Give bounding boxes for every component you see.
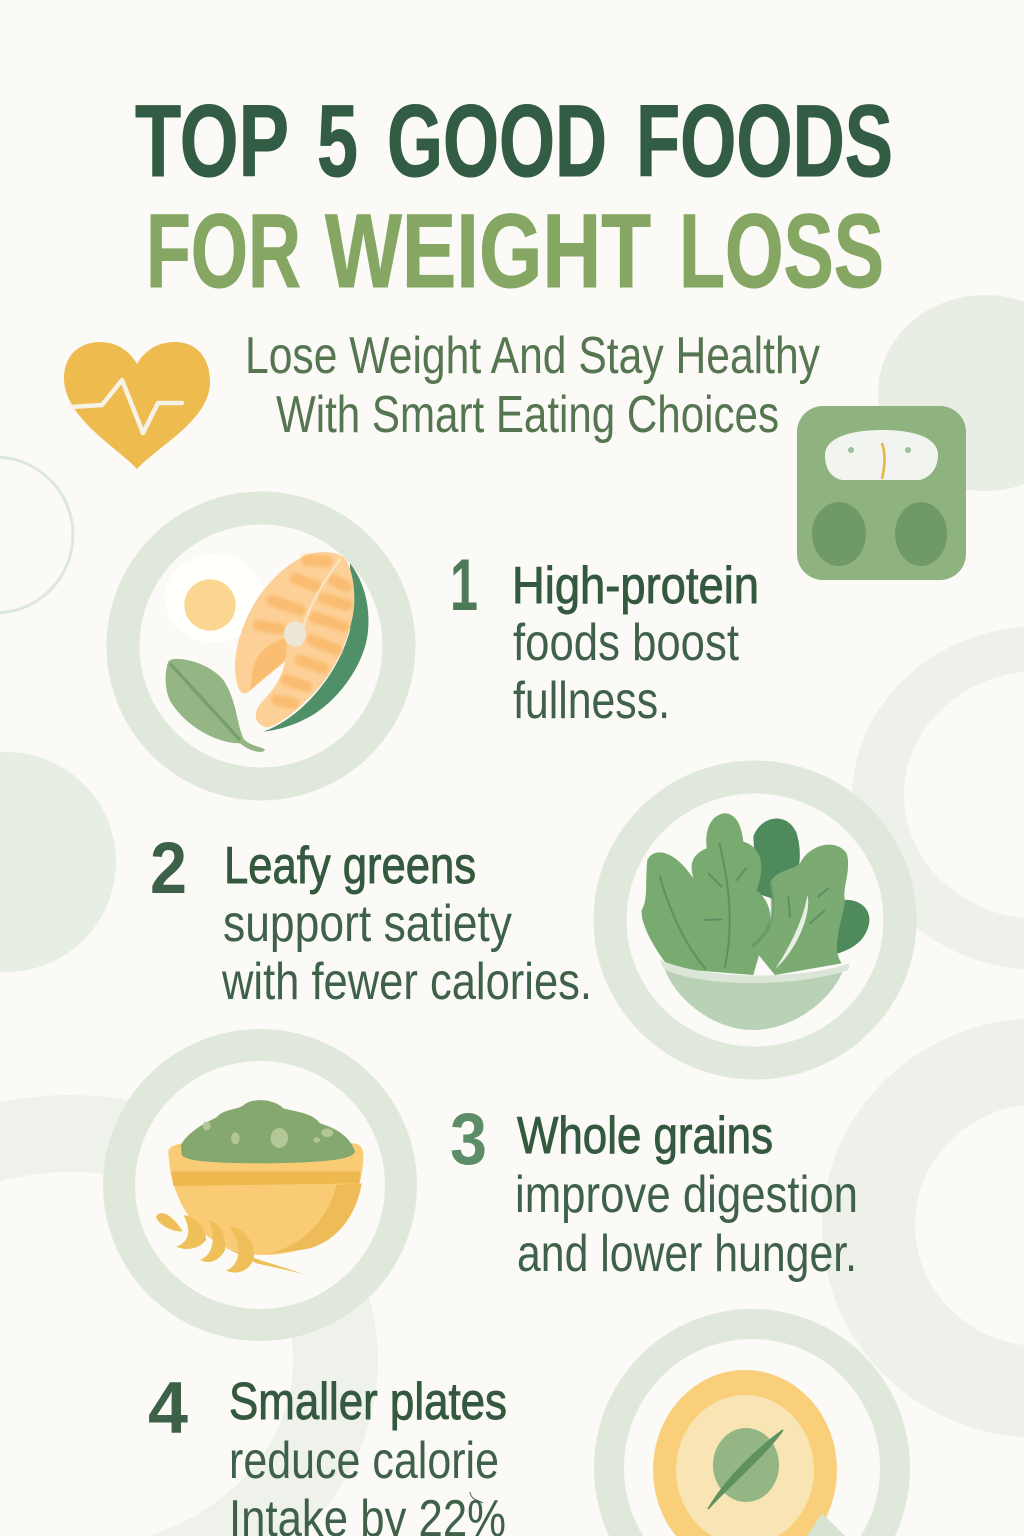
item 1 text <box>512 557 759 730</box>
title: LOSS <box>679 193 884 310</box>
panel: item 2 leafy greens <box>610 777 900 1063</box>
icon: egg <box>165 554 263 642</box>
item 2 number: 2 <box>150 828 187 909</box>
plate ring 3 <box>119 1045 401 1325</box>
item 3 text: Whole grains <box>517 1107 773 1165</box>
plate ring 4 <box>609 1324 895 1536</box>
panel: item 3 whole grains <box>119 1045 401 1325</box>
item 3 text <box>515 1107 858 1283</box>
icon: weighing scale <box>797 406 966 580</box>
title: GOOD <box>387 84 607 198</box>
icon: spinach leaf <box>166 659 265 752</box>
item 1 text: High-protein <box>512 557 759 615</box>
item 4 text: Smaller plates <box>229 1373 507 1431</box>
icon: grain bowl <box>156 1100 363 1274</box>
item 1 text: foods boost <box>513 614 739 672</box>
subtitle: Lose Weight And Stay Healthy <box>245 327 820 385</box>
title: WEIGHT <box>325 193 651 310</box>
item 4 number: 4 <box>148 1368 188 1449</box>
item 2 text: with fewer calories. <box>221 953 592 1011</box>
icon: salmon steak <box>235 552 368 732</box>
title: FOR <box>146 193 301 310</box>
icon: small plate <box>653 1370 845 1536</box>
icon: salad bowl <box>642 813 869 1030</box>
item 2 text <box>221 837 592 1011</box>
title: 5 <box>317 84 358 198</box>
subtitle <box>245 327 820 444</box>
plate ring 1 <box>123 508 399 784</box>
item 4 text: reduce calorie <box>229 1432 499 1490</box>
panel: item 4 smaller plates <box>609 1324 895 1536</box>
panel: item 1 high-protein <box>123 508 399 784</box>
item 3 text: improve digestion <box>515 1166 858 1224</box>
item 3 number: 3 <box>450 1099 487 1180</box>
title <box>135 84 893 310</box>
item 4 text <box>229 1373 507 1536</box>
item 3 text: and lower hunger. <box>517 1225 857 1283</box>
plate ring 2 <box>610 777 900 1063</box>
icon: heart with pulse <box>64 342 210 469</box>
item 1 number: 1 <box>450 545 478 626</box>
item 2 text: Leafy greens <box>224 837 476 895</box>
title: TOP <box>135 84 289 198</box>
item 1 text: fullness. <box>513 672 670 730</box>
item 2 text: support satiety <box>223 895 512 953</box>
subtitle: With Smart Eating Choices <box>276 386 779 444</box>
title: FOODS <box>636 84 893 198</box>
